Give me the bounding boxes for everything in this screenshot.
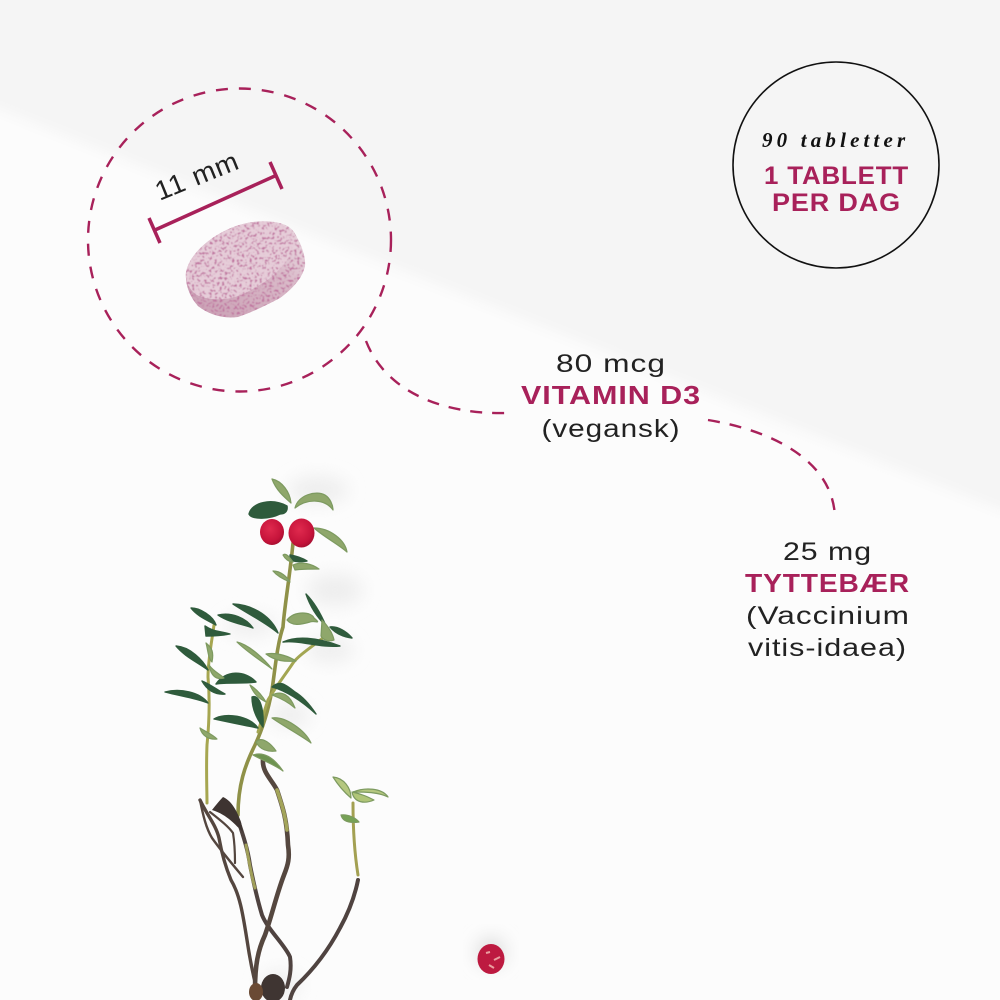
stems [200, 543, 358, 1000]
connector: tablet to vitamin D3 [366, 341, 508, 413]
lingonberry plant [165, 476, 388, 1000]
latin name line 2: vitis-idaea) [748, 634, 907, 662]
ingredient: vitamin D3 [521, 350, 701, 443]
root knot [261, 974, 285, 1000]
berry shadow [477, 938, 505, 966]
tablet side [186, 221, 305, 317]
dashed circle: tablet size [88, 88, 391, 392]
berry left [260, 519, 284, 545]
connector: vitamin D3 to tyttebær [708, 420, 835, 520]
size measure: 11 mm [149, 146, 282, 243]
dried dark leaf [212, 797, 243, 832]
root base [249, 983, 263, 1000]
berry marks [486, 952, 500, 968]
daily dose line 2: PER DAG [772, 189, 901, 217]
loose berry [477, 938, 505, 974]
ingredient: tyttebær [745, 538, 910, 662]
amount: 25 mg [783, 538, 872, 566]
tablet top face [186, 222, 296, 299]
latin name line 1: (Vaccinium [746, 602, 910, 630]
name: TYTTEBÆR [745, 568, 910, 598]
leaves dark [165, 502, 352, 728]
pair of red berries [260, 518, 314, 548]
daily dose line 1: 1 TABLETT [764, 162, 909, 190]
badge: dosage [733, 62, 939, 268]
tablet image [186, 221, 305, 317]
berry body [478, 944, 504, 974]
amount: 80 mcg [556, 350, 666, 378]
pack size: 90 tabletter [762, 128, 906, 152]
name: VITAMIN D3 [521, 380, 701, 410]
berry right [288, 518, 314, 548]
measure bar [149, 162, 282, 243]
plant shadows [224, 476, 363, 999]
badge circle [733, 62, 939, 268]
measure label: 11 mm [151, 146, 243, 206]
note: (vegansk) [542, 415, 680, 443]
leaves light [200, 479, 388, 822]
